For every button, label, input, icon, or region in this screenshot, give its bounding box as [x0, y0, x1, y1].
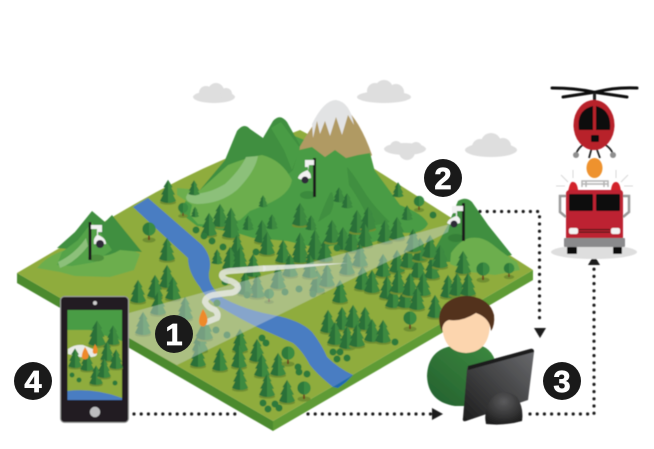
step badge 2 [424, 159, 462, 197]
helicopter cabin [574, 100, 614, 150]
terrain block [17, 130, 533, 431]
helicopter skids and cable [576, 144, 613, 158]
mountain: snow peak [270, 100, 420, 232]
computer monitor [463, 349, 534, 425]
step badge 1: 1 [165, 317, 183, 352]
land right side [273, 270, 533, 431]
truck shadow [551, 245, 637, 259]
step badge 4 [14, 362, 52, 400]
step badge 3: 3 [553, 364, 571, 399]
river [133, 198, 353, 388]
dotted arrow: camera to operator [480, 212, 546, 338]
mountain: left small [37, 211, 142, 277]
bushes [192, 212, 436, 412]
smartphone [60, 296, 128, 422]
truck body [566, 190, 623, 238]
step badge 3 [543, 362, 581, 400]
camera detection beam [129, 224, 450, 365]
camera: right hill [447, 203, 465, 242]
camera: left [88, 222, 106, 262]
land surface [17, 130, 533, 421]
step badge 2: 2 [434, 161, 452, 196]
illustrated artwork [17, 80, 637, 431]
truck mirrors [560, 196, 629, 217]
operator body [427, 346, 497, 406]
fire truck [551, 170, 637, 259]
dotted arrow: operator to fire truck [530, 255, 600, 414]
operator head [442, 300, 490, 353]
cloud 2 [357, 80, 411, 103]
cloud 4 [465, 133, 517, 157]
cloud 1 [193, 83, 235, 103]
land left side [17, 273, 273, 431]
green foothill zone [180, 130, 428, 248]
cloud 3 [384, 141, 426, 160]
truck beacon rays [556, 170, 633, 186]
conifer forest [130, 180, 476, 405]
fire flame [199, 309, 208, 327]
water bucket [586, 158, 602, 178]
round trees [142, 196, 514, 402]
dotted arrow: phone to operator [134, 408, 443, 420]
smoke plume [205, 263, 348, 322]
phone screen map [68, 310, 123, 400]
camera: mountain [298, 158, 316, 199]
operator hair [439, 296, 494, 332]
mountain: right small [432, 199, 520, 275]
step badge 4: 4 [24, 364, 42, 399]
step badge 1 [155, 315, 193, 353]
helicopter [552, 88, 637, 178]
mountain: twin peaks [177, 117, 300, 225]
operator person [427, 296, 497, 406]
helicopter rotor [552, 88, 637, 97]
truck bumper and wheels [564, 238, 625, 247]
truck ladder [582, 181, 608, 187]
